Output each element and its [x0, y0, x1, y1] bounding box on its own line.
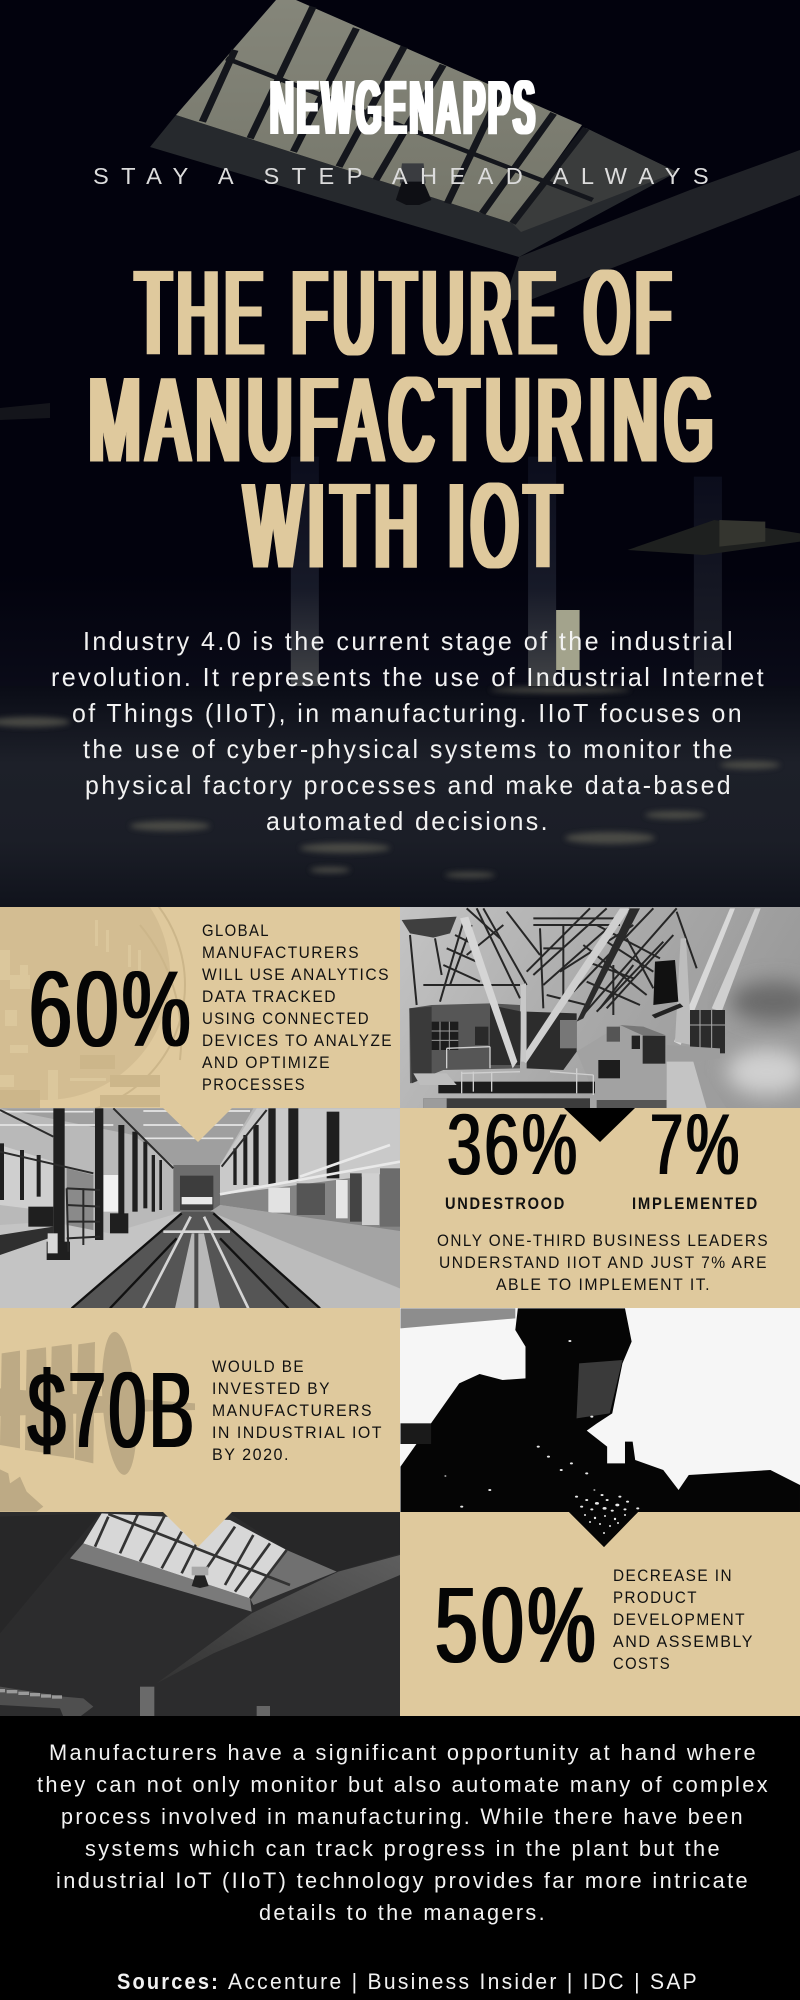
intro paragraph: physical factory processes and make data-based [85, 770, 733, 800]
conclusion paragraph: systems which can track progress in the plant but the [85, 1836, 722, 1861]
photo: dark skylight [0, 1512, 400, 1717]
stat description: ABLE TO IMPLEMENT IT. [496, 1275, 711, 1294]
stat description: WILL USE ANALYTICS [202, 965, 390, 984]
label: implemented: IMPLEMENTED [632, 1194, 759, 1213]
stat number: 7%: 7% [650, 1097, 742, 1193]
tagline: STAY A STEP AHEAD ALWAYS [93, 163, 721, 189]
photo: factory hall [0, 1108, 400, 1308]
stat description: COSTS [613, 1654, 671, 1673]
hero floor [0, 686, 800, 907]
stat description: UNDERSTAND IIOT AND JUST 7% ARE [439, 1253, 768, 1272]
stat description: MANUFACTURERS [202, 943, 360, 962]
arrow notch: skylight [163, 1512, 232, 1547]
stat description: IN INDUSTRIAL IOT [212, 1423, 383, 1442]
hero panel [0, 0, 800, 907]
stat number: $70B: $70B [28, 1349, 197, 1470]
photo: crane [400, 907, 800, 1110]
stat description: AND ASSEMBLY [613, 1632, 754, 1651]
panel: $70B stat [0, 1308, 400, 1512]
intro paragraph: revolution. It represents the use of Industrial Internet [51, 662, 766, 692]
stat description [212, 1357, 383, 1464]
intro paragraph [51, 626, 766, 836]
stat number: 60%: 60% [29, 948, 194, 1069]
photo: welder [400, 1308, 800, 1513]
stat description: MANUFACTURERS [212, 1401, 373, 1420]
arrow notch: welder sparks [569, 1512, 638, 1547]
arrow notch: factory [163, 1108, 232, 1142]
stat description: INVESTED BY [212, 1379, 331, 1398]
decorative radial pattern [0, 907, 186, 1108]
label: understood: UNDESTROOD [445, 1194, 566, 1213]
conclusion paragraph: they can not only monitor but also automate many of complex [37, 1772, 770, 1797]
panel: conclusion footer [0, 1716, 800, 2000]
stat description: BY 2020. [212, 1445, 290, 1464]
conclusion paragraph [37, 1740, 770, 1925]
panel: 36% and 7% stats [400, 1097, 800, 1308]
stat description: DEVICES TO ANALYZE [202, 1031, 393, 1050]
conclusion paragraph: details to the managers. [259, 1900, 547, 1925]
main title [89, 246, 720, 593]
sources line: Sources: [117, 1969, 220, 1994]
intro paragraph: the use of cyber-physical systems to monitor the [83, 734, 735, 764]
stat description: DATA TRACKED [202, 987, 337, 1006]
stat description [613, 1566, 754, 1673]
conclusion paragraph: industrial IoT (IIoT) technology provides far more intricate [56, 1868, 750, 1893]
stat description: GLOBAL [202, 921, 270, 940]
stat description [202, 921, 393, 1094]
hero photo: factory skylight interior [0, 0, 800, 907]
stat description: AND OPTIMIZE [202, 1053, 331, 1072]
stat number: 50%: 50% [435, 1564, 599, 1685]
panel: 50% stat [400, 1512, 800, 1716]
stat description: USING CONNECTED [202, 1009, 370, 1028]
intro paragraph: of Things (IIoT), in manufacturing. IIoT focuses on [72, 698, 744, 728]
stat description: PROCESSES [202, 1075, 306, 1094]
stat description: WOULD BE [212, 1357, 305, 1376]
sources line: Accenture | Business Insider | IDC | SAP [228, 1969, 699, 1994]
conclusion paragraph: process involved in manufacturing. While there have been [61, 1804, 745, 1829]
decorative microphone silhouette [0, 1331, 195, 1512]
conclusion paragraph: Manufacturers have a significant opportunity at hand where [49, 1740, 758, 1765]
stat number: 36%: 36% [447, 1097, 580, 1193]
stat description [437, 1231, 769, 1294]
stat description: DEVELOPMENT [613, 1610, 746, 1629]
stat description: DECREASE IN [613, 1566, 733, 1585]
stat description: PRODUCT [613, 1588, 698, 1607]
intro paragraph: Industry 4.0 is the current stage of the industrial [83, 626, 735, 656]
stat description: ONLY ONE-THIRD BUSINESS LEADERS [437, 1231, 769, 1250]
panel: 60% stat [0, 907, 400, 1108]
intro paragraph: automated decisions. [266, 806, 550, 836]
hero back wall, columns and window [0, 457, 800, 697]
